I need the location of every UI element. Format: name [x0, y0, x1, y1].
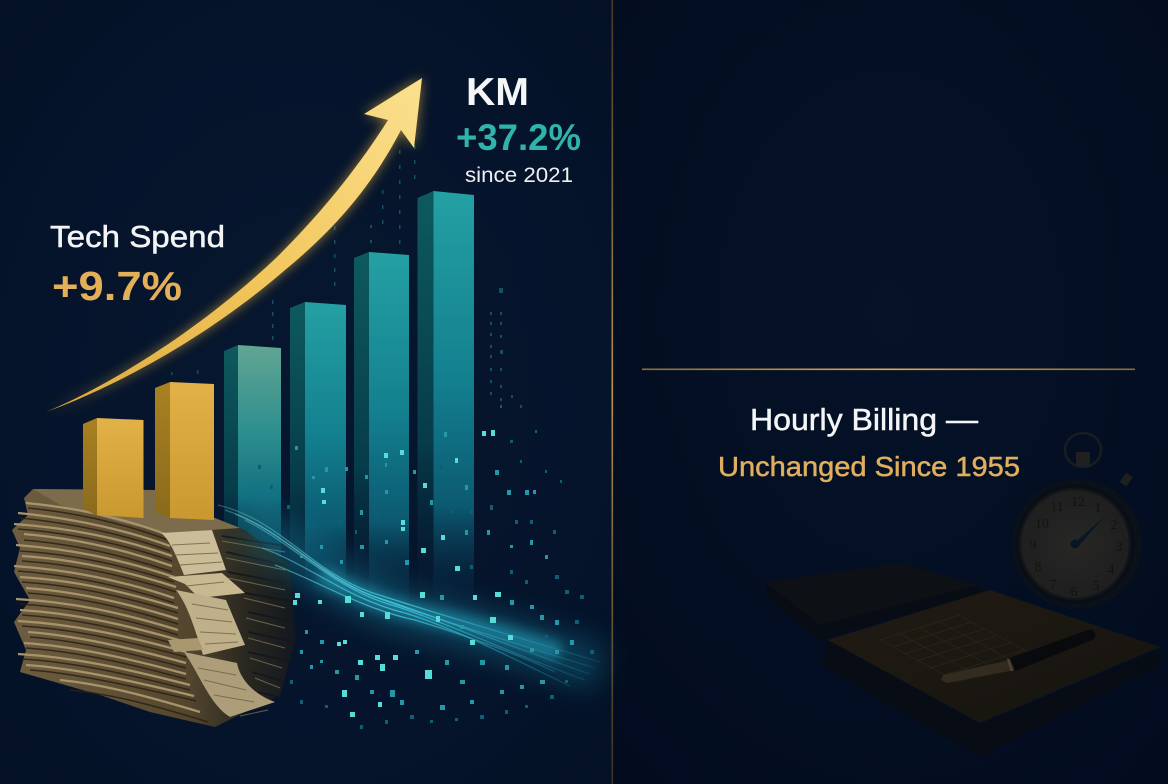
icon: pocket watch: 11: [1050, 500, 1064, 515]
data pixel particles: [258, 405, 594, 729]
icon: pocket watch: [1012, 433, 1142, 609]
icon: pocket watch: 8: [1034, 560, 1042, 575]
icon: open ledger: [820, 590, 1160, 757]
value: +37.2%: +37.2%: [456, 117, 581, 158]
icon: pocket watch: 5: [1092, 579, 1100, 594]
panel: hourly billing: [642, 368, 1160, 757]
icon: pocket watch: 10: [1035, 517, 1049, 532]
background: left panel: [0, 0, 612, 784]
bar 2: [155, 382, 214, 520]
icon: pocket watch: 4: [1108, 563, 1114, 578]
icon: closed book: [765, 563, 985, 640]
vertical panel divider: [612, 0, 613, 784]
icon: pocket watch: 2: [1110, 518, 1118, 533]
heading: Hourly Billing: Hourly Billing —: [750, 402, 978, 437]
bar 1: [83, 418, 144, 518]
data trail dots above bars: [171, 130, 522, 408]
bar 6: [418, 191, 474, 610]
icon: pocket watch: 12: [1071, 495, 1085, 510]
bar 3: [224, 345, 281, 590]
label text: Tech Spend: Tech Spend: [50, 219, 225, 254]
bar 5: [354, 252, 409, 610]
bar 4: [290, 302, 346, 600]
icon: pocket watch: 3: [1116, 540, 1122, 555]
label text: KM: KM: [466, 71, 529, 114]
icon: pocket watch: 6: [1070, 585, 1078, 600]
icon: fountain pen: [941, 630, 1095, 683]
value: +9.7%: +9.7%: [52, 263, 182, 309]
paper stack: [12, 489, 296, 727]
caption: since 2021: since 2021: [465, 164, 573, 187]
panel: KM growth visual: [12, 78, 600, 729]
label: KM: [456, 71, 581, 187]
icon: pocket watch: 9: [1030, 538, 1036, 553]
data flow stream: [218, 505, 600, 686]
background: right panel: [612, 0, 1168, 784]
label: Tech Spend: [50, 219, 225, 309]
growth arrow: [46, 78, 422, 412]
icon: pocket watch: 1: [1094, 501, 1102, 516]
horizontal gold rule: [642, 368, 1135, 370]
icon: pocket watch: 7: [1050, 578, 1056, 593]
paper strips: [161, 530, 275, 717]
subheading: Unchanged Since 1955: Unchanged Since 1955: [718, 451, 1020, 482]
